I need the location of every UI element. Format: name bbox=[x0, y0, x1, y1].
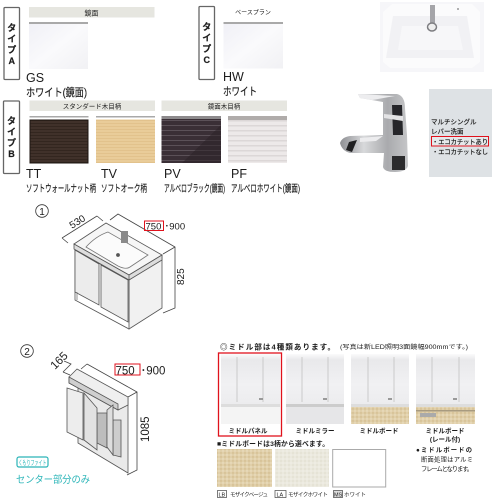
text: faucet name: レバー洗面 bbox=[431, 126, 464, 136]
panel: type C bbox=[199, 6, 283, 98]
header: mirror finish bbox=[29, 7, 154, 18]
swatch: LA bbox=[275, 449, 329, 498]
dimension: 1085: 1085 bbox=[140, 416, 152, 442]
dimension: 825: 825 bbox=[176, 268, 187, 285]
marker: 2: 2 bbox=[24, 347, 30, 358]
label: PV bbox=[164, 167, 225, 195]
label: GS: ホワイト(鏡面) bbox=[26, 86, 87, 99]
label: type C: プ bbox=[202, 44, 211, 54]
text: center part only: センター部分のみ bbox=[16, 474, 90, 486]
swatch: LB bbox=[217, 449, 272, 498]
heading: mid section types: ◎ミドル部は4種類あります。 bbox=[220, 342, 335, 352]
note: board edge treatment: 断面処理はアルミ bbox=[421, 454, 473, 464]
label: TV bbox=[101, 167, 147, 195]
label: type A bbox=[4, 8, 20, 80]
label: type B: イ bbox=[7, 127, 16, 137]
note: board edge treatment: フレームとなります。 bbox=[421, 465, 473, 473]
label: type C: C bbox=[203, 55, 210, 65]
option: mid board bbox=[351, 354, 409, 435]
note: board edge treatment bbox=[416, 445, 473, 473]
heading: base plan: ベースプラン bbox=[235, 10, 271, 16]
swatch: MS bbox=[333, 450, 386, 498]
label: PV: PV bbox=[164, 167, 181, 181]
highlight: eco cut yes: ・エコカチットあり bbox=[432, 138, 488, 146]
marker: 2 bbox=[21, 345, 33, 358]
option: mid board with rail bbox=[416, 354, 475, 444]
label: HW bbox=[223, 70, 257, 98]
label: TT bbox=[26, 167, 96, 195]
option: mid panel (highlighted): ミドルパネル bbox=[228, 427, 268, 435]
header: mirror wood grain bbox=[162, 100, 287, 111]
badge: anti-fog bbox=[17, 457, 48, 467]
label: PF: PF bbox=[231, 167, 247, 181]
label: HW: HW bbox=[223, 70, 244, 84]
dimension: 165: 165 bbox=[49, 350, 71, 372]
text: three board patterns: ■ミドルボードは3柄から選べます。 bbox=[217, 439, 329, 448]
badge: anti-fog: くもりファイト bbox=[18, 459, 46, 467]
dimension lines bbox=[62, 214, 175, 313]
label: type B: プ bbox=[7, 138, 16, 148]
label: type B: タ bbox=[7, 115, 16, 126]
dimension: 900: ･900 bbox=[164, 222, 185, 232]
swatch: LA: LA bbox=[276, 492, 284, 498]
dimension: 750 highlighted: 750 bbox=[146, 222, 161, 232]
swatch: LB: モザイクベージュ bbox=[230, 492, 268, 498]
dimension: 750 highlighted: 750 bbox=[116, 366, 135, 378]
header: mirror wood grain: 鏡面木目柄 bbox=[208, 102, 241, 110]
swatch: PV bbox=[162, 116, 221, 163]
label: type A: タ bbox=[7, 22, 16, 33]
swatch: MS: MS bbox=[334, 492, 343, 498]
dimension: 750 highlighted bbox=[115, 364, 140, 378]
label: HW: ホワイト bbox=[223, 85, 257, 98]
swatch: HW bbox=[224, 22, 283, 68]
text: faucet name bbox=[431, 117, 477, 136]
heading: mid section types: (写真は新LED照明3面鏡幅900mmです。) bbox=[340, 343, 468, 351]
option: mid mirror bbox=[286, 354, 344, 435]
label: TV: TV bbox=[101, 167, 118, 181]
photo: faucet bbox=[340, 94, 408, 172]
label: type A: イ bbox=[7, 34, 16, 44]
label: type B bbox=[4, 101, 20, 174]
dimension lines bbox=[63, 361, 137, 475]
marker: 1: 1 bbox=[39, 207, 45, 218]
label: type C: タ bbox=[202, 21, 211, 32]
label: TT: ソフトウォールナット柄 bbox=[26, 182, 96, 195]
text: faucet name: マルチシングル bbox=[431, 117, 477, 126]
photo: sink basin bbox=[380, 2, 484, 72]
swatch: LB: LB bbox=[218, 492, 226, 498]
label: type C: イ bbox=[202, 33, 211, 43]
option: mid mirror: ミドルミラー bbox=[296, 427, 334, 435]
label: PF bbox=[231, 167, 300, 195]
text: eco cut none: ・エコカチットなし bbox=[432, 148, 488, 156]
option: mid board with rail: ミドルボード bbox=[426, 426, 464, 435]
swatch: MS: ホワイト bbox=[344, 492, 366, 498]
label: type C bbox=[199, 6, 214, 80]
header: standard wood grain: スタンダード木目柄 bbox=[63, 102, 122, 110]
dimension: 530: 530 bbox=[68, 213, 88, 232]
heading: mid section types bbox=[220, 342, 468, 352]
swatch: PF bbox=[228, 116, 287, 163]
option: mid board with rail: (レール付) bbox=[430, 434, 460, 444]
label: type A: A bbox=[8, 56, 15, 66]
note: board edge treatment: ●ミドルボードの bbox=[416, 445, 472, 454]
label: PV: アルベロブラック(鏡面) bbox=[164, 182, 225, 195]
diagram: mirror cabinet bbox=[63, 361, 137, 475]
marker: 1 bbox=[36, 205, 48, 218]
swatch: TT bbox=[30, 116, 88, 163]
panel: faucet options bbox=[429, 89, 492, 177]
swatch: TV bbox=[96, 116, 155, 163]
swatch: GS bbox=[29, 22, 88, 69]
swatch: LA: モザイクホワイト bbox=[288, 492, 328, 498]
label: PF: アルベロホワイト(鏡面) bbox=[231, 182, 300, 195]
label: type A: プ bbox=[7, 45, 16, 55]
label: GS: GS bbox=[26, 71, 44, 85]
header: mirror finish: 鏡面 bbox=[84, 8, 98, 18]
header: standard wood grain bbox=[30, 100, 155, 111]
dimension: 900: ･900 bbox=[140, 366, 165, 378]
label: TT: TT bbox=[26, 167, 42, 181]
diagram: vanity cabinet bbox=[62, 214, 175, 329]
label: TV: ソフトオーク柄 bbox=[101, 182, 147, 195]
option: mid panel (highlighted) bbox=[218, 353, 282, 436]
panel: type B bbox=[4, 100, 300, 195]
panel: type A bbox=[4, 7, 154, 99]
label: GS bbox=[26, 71, 87, 99]
option: mid board: ミドルボード bbox=[360, 426, 398, 435]
label: type B: B bbox=[8, 149, 15, 159]
